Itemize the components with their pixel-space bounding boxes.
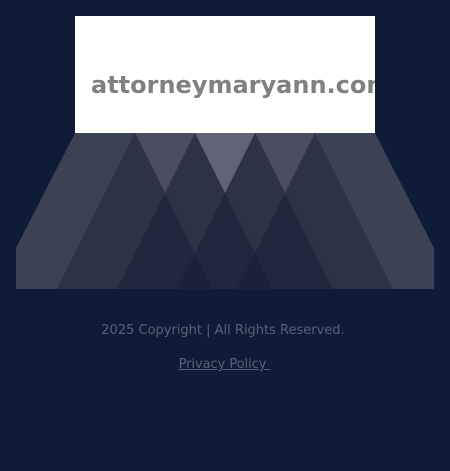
privacy policy link: Privacy Policy [179,357,266,372]
peak triangle 4 [237,133,393,289]
peak triangle 1 [57,133,213,289]
white domain panel [75,16,375,133]
light inverted triangle centre [195,133,255,193]
peak triangle 2 [117,133,273,289]
peak triangle 3 [177,133,333,289]
copyright text: 2025 Copyright | All Rights Reserved. [101,323,345,338]
outer trapezoid [16,133,434,289]
light inverted triangle right [255,133,315,193]
light inverted triangle left [135,133,195,193]
